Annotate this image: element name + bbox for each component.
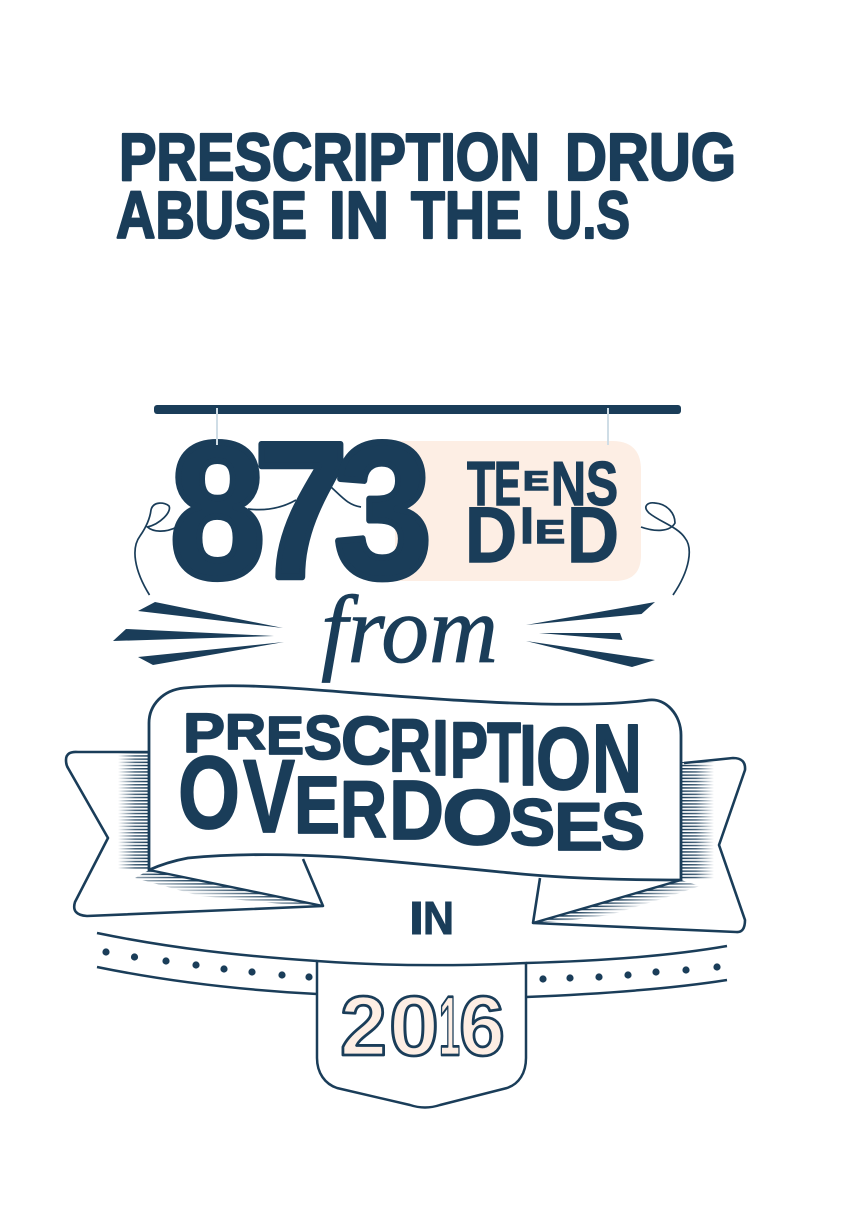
year 2016: 0 [389,979,439,1073]
word: overdoses: O [178,735,240,850]
word: overdoses: D [389,763,444,857]
word: overdoses: E [294,760,340,851]
word: prescription: I [519,708,537,804]
word: prescription: T [487,706,521,801]
title: DRUG [565,120,736,195]
number 873: 3 [334,402,432,618]
number 873: 8 [170,402,265,618]
word: prescription: P [450,705,488,794]
left hook [216,408,218,445]
band dots left [102,948,313,981]
year 2016: 1 [439,979,460,1073]
label: died: E [535,514,565,550]
word: prescription: N [592,704,642,813]
word: prescription: O [536,709,591,808]
word: prescription: P [183,701,225,764]
label: teens: S [586,450,618,519]
label: teens: T [467,450,495,519]
right decorative cord [641,503,689,595]
label: died: D [465,490,517,579]
word: prescription: R [389,703,431,787]
label: died: D [567,490,619,579]
word: prescription: C [341,703,391,779]
year 2016: 2 [340,979,387,1073]
right ribbon tail [533,758,745,932]
title: IN [329,178,389,253]
word: overdoses: O [442,773,513,861]
title: U.S [546,178,630,253]
word: prescription: R [225,704,266,760]
script word: from: from [321,576,498,683]
band left [97,933,317,994]
word: overdoses: S [510,785,555,859]
lower band [97,933,727,1108]
word: overdoses: E [554,789,603,865]
label: teens: E [523,466,549,496]
left decorative cord [135,503,177,595]
main ribbon panel [149,686,681,880]
hanging sign: 873 teens died [135,402,689,618]
word: in: N [423,892,454,944]
word: overdoses: V [243,739,295,855]
hanging bar [154,405,681,414]
ribbon banner [66,686,745,932]
word: prescription: E [266,706,304,766]
rays left [113,602,284,665]
title: PRESCRIPTION [119,120,540,195]
number 873: 7 [254,402,348,618]
title [116,120,736,253]
left ribbon tail [66,752,323,916]
word: prescription: I [432,703,449,792]
band dots right [539,963,721,983]
middle decorative cord [248,487,361,510]
peach sign panel [395,441,641,581]
word: prescription: S [304,704,342,773]
word: overdoses: R [340,765,387,855]
label: teens: E [494,450,521,519]
word: in: I [409,892,424,944]
right hook [607,408,609,445]
label: teens: N [551,450,586,519]
rays right [526,602,655,667]
year 2016: 6 [459,979,505,1073]
title: ABUSE [116,178,307,253]
label: died: I [520,497,534,554]
fold lines [149,870,681,923]
shield [317,961,526,1108]
word: overdoses: S [601,789,645,863]
band right [526,946,727,997]
title: THE [411,178,522,253]
hatching [118,753,714,923]
